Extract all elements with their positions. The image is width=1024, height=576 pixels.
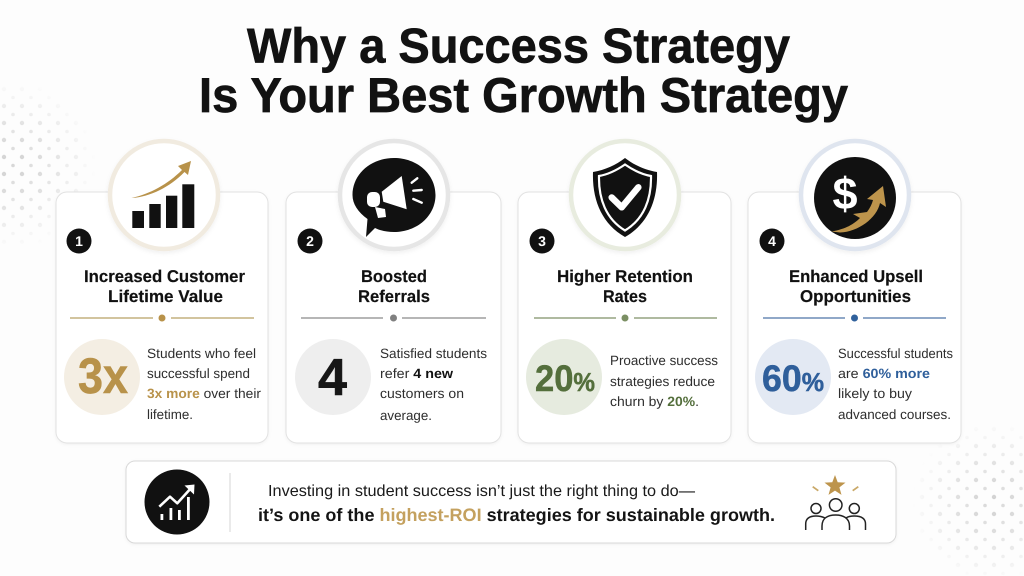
panel: bottom callout	[126, 461, 896, 543]
description: customers on	[380, 386, 464, 401]
panel: enhanced upsell opportunities	[748, 141, 961, 443]
description: Students who feel	[147, 346, 256, 361]
description: lifetime.	[147, 407, 193, 422]
description: strategies reduce	[610, 374, 715, 389]
panel: boosted referrals	[286, 141, 501, 443]
heading: Enhanced Upsell	[789, 267, 923, 286]
callout text	[258, 483, 775, 525]
number badge 3	[530, 228, 554, 254]
heading: Lifetime Value	[108, 287, 223, 306]
title: Why a Success Strategy	[247, 20, 790, 74]
callout text: it’s one of the highest-ROI strategies for sustainable growth.	[258, 505, 775, 525]
heading: Rates	[603, 287, 647, 306]
number badge 2	[298, 228, 322, 254]
description: Satisfied students	[380, 346, 487, 361]
description: churn by 20%.	[610, 394, 699, 409]
heading	[84, 267, 245, 306]
icon: shield with check mark	[571, 141, 679, 249]
stat: 4: 4	[318, 349, 347, 407]
description	[147, 346, 262, 422]
icon: growth chart in circle	[144, 470, 210, 534]
heading: Referrals	[358, 287, 430, 306]
heading: Increased Customer	[84, 267, 245, 286]
panel: higher retention rates	[518, 141, 731, 443]
callout text: Investing in student success isn’t just the right thing to do—	[268, 483, 695, 500]
description: Proactive success	[610, 353, 718, 368]
number badge 4: 4	[768, 233, 776, 249]
heading: Higher Retention	[557, 267, 693, 286]
icon: team with gold star	[806, 475, 866, 530]
stat: 3x: 3x	[78, 348, 128, 404]
description: Successful students	[838, 346, 953, 361]
heading: Opportunities	[800, 287, 911, 306]
description	[610, 353, 718, 409]
number badge 2: 2	[306, 233, 314, 249]
heading	[358, 267, 430, 306]
number badge 1: 1	[75, 233, 83, 249]
stat: 3x	[64, 339, 140, 415]
description: advanced courses.	[838, 407, 951, 422]
description: refer 4 new	[380, 366, 454, 381]
heading	[789, 267, 923, 306]
description: successful spend	[147, 366, 250, 381]
stat: 4	[295, 339, 371, 415]
icon: rising bar chart with gold arrow	[110, 141, 218, 249]
panel: increased customer lifetime value	[56, 141, 268, 443]
description: likely to buy	[838, 386, 912, 401]
description: 3x more over their	[147, 386, 262, 401]
stat: 60%	[755, 339, 831, 415]
title: Is Your Best Growth Strategy	[199, 69, 848, 123]
description: average.	[380, 408, 432, 423]
stat: 20%	[526, 339, 602, 415]
description	[380, 346, 487, 423]
heading: Boosted	[361, 267, 427, 286]
stat: 20%: 20%	[535, 358, 595, 399]
icon: dollar sign with gold arrow	[801, 141, 909, 249]
stat: 60%: 60%	[762, 358, 824, 399]
heading	[557, 267, 693, 306]
description	[838, 346, 953, 422]
icon: megaphone in speech bubble	[340, 141, 448, 249]
number badge 4	[760, 228, 784, 254]
description: are 60% more	[838, 366, 931, 381]
number badge 1	[66, 228, 92, 254]
number badge 3: 3	[538, 233, 546, 249]
title	[199, 20, 848, 123]
icon: dollar sign with gold arrow: $	[832, 168, 858, 219]
